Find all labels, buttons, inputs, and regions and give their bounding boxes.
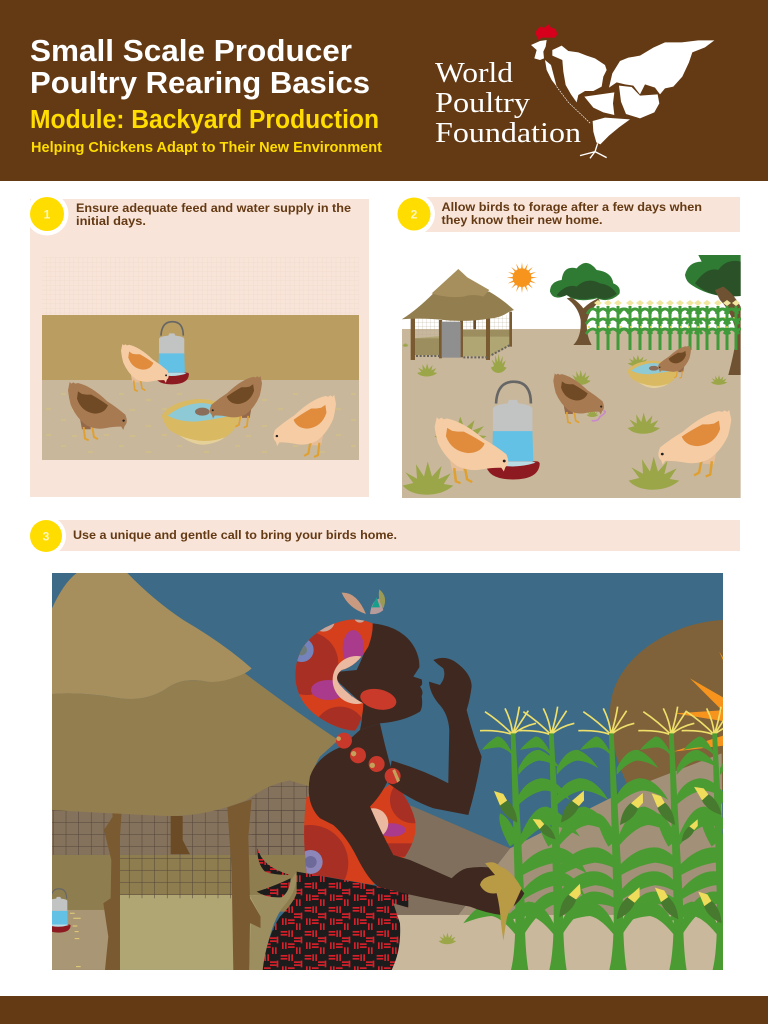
subtitle: Helping Chickens Adapt to Their New Environment [31, 140, 382, 156]
skirt sash [249, 872, 297, 970]
step 3 text: Use a unique and gentle call to bring your birds home. [73, 528, 397, 542]
step 1 text [76, 201, 351, 228]
skirt [263, 872, 408, 970]
dress bodice [304, 784, 416, 885]
chicken: light right [658, 410, 731, 476]
torso and feeding arm [309, 723, 524, 915]
module heading: Module: Backyard Production [30, 106, 379, 134]
skirt bow [257, 848, 291, 897]
step 2 badge [393, 193, 435, 235]
title: Small Scale Producer [30, 33, 352, 68]
step 2 text: they know their new home. [442, 213, 602, 227]
woman figure [249, 589, 524, 970]
header band [0, 0, 768, 181]
chicken: light right [274, 395, 336, 457]
hut [402, 269, 514, 360]
scene 3: woman calling birds [46, 573, 768, 972]
step 1 text: initial days. [76, 214, 146, 228]
scene 2: outdoor yard [402, 255, 748, 498]
raised arm [388, 658, 482, 815]
head wrap [295, 620, 373, 731]
step 2 badge: 2 [411, 208, 418, 222]
chicken: light back [121, 344, 169, 391]
corn field [586, 300, 748, 350]
logo wordmark [435, 58, 581, 149]
title: Poultry Rearing Basics [30, 65, 370, 100]
step 1 badge: 1 [44, 208, 51, 222]
logo wordmark: Foundation [435, 118, 581, 149]
chicken: brown drinking far [658, 346, 691, 378]
chicken: brown drinking [210, 376, 262, 428]
corn plants [464, 706, 723, 970]
panel 1: feed and water [26, 192, 369, 497]
logo: chicken world map [531, 24, 714, 158]
chicken: light at drinker [435, 417, 508, 483]
step 2 text [442, 200, 702, 227]
step 2 text: Allow birds to forage after a few days when [442, 200, 702, 214]
title [30, 33, 370, 100]
head [337, 623, 422, 730]
water bowl far [627, 361, 678, 388]
earring [360, 688, 396, 710]
hut [46, 573, 338, 970]
step 3 badge: 3 [43, 530, 50, 544]
grain in hand [480, 862, 522, 941]
footer band [0, 996, 768, 1024]
hills and ground [380, 753, 723, 972]
logo wordmark: World [435, 58, 513, 89]
distant hill and sun [610, 620, 733, 790]
necklace beads [336, 733, 401, 784]
step 1 text: Ensure adequate feed and water supply in the [76, 201, 351, 215]
tree right [685, 255, 741, 375]
sun [507, 262, 537, 293]
chicken: brown with worm [553, 373, 605, 423]
panel 2: foraging [393, 193, 748, 498]
small drinker [52, 888, 71, 933]
step 3 badge [26, 516, 66, 556]
water bowl [162, 399, 240, 445]
logo wordmark: Poultry [435, 88, 530, 119]
drinker large [486, 382, 540, 479]
tree left [550, 263, 620, 345]
head wrap knot leaves [342, 589, 385, 614]
panel 3 heading bar [26, 516, 740, 556]
chicken: brown left [68, 382, 127, 440]
step 1 badge [26, 192, 68, 236]
drinker [154, 322, 189, 384]
scene 1: coop interior [42, 257, 359, 460]
grass tufts [402, 343, 727, 495]
